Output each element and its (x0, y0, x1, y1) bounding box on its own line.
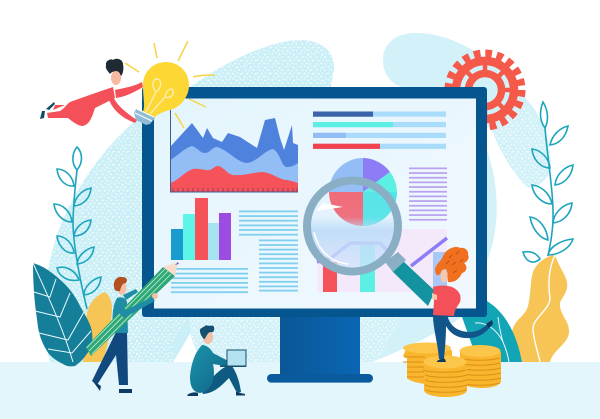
coin stacks (403, 342, 501, 397)
purple text lines (409, 168, 447, 221)
man holding pencil (86, 262, 179, 393)
left yellow leaf (83, 292, 112, 362)
right teal leaf (462, 301, 522, 362)
bar chart (171, 198, 231, 260)
blue text lines (171, 210, 298, 293)
progress bars (313, 112, 446, 149)
floor (0, 362, 600, 419)
monitor frame and screen (142, 87, 487, 317)
sitting man with laptop (187, 325, 246, 396)
lower right chart (317, 229, 447, 292)
light bulb (125, 41, 215, 128)
monitor stand (267, 315, 373, 383)
woman with light bulb: flying (40, 59, 143, 126)
area chart (170, 110, 298, 192)
gear (448, 54, 522, 126)
right yellow leaf plant (512, 255, 569, 362)
pie chart (329, 158, 397, 226)
left teal plant (54, 147, 101, 309)
right teal plant (523, 102, 573, 262)
magnifying glass (307, 180, 435, 306)
background blobs (44, 33, 551, 362)
left large teal leaf (33, 263, 92, 366)
woman standing on coins (432, 247, 493, 362)
